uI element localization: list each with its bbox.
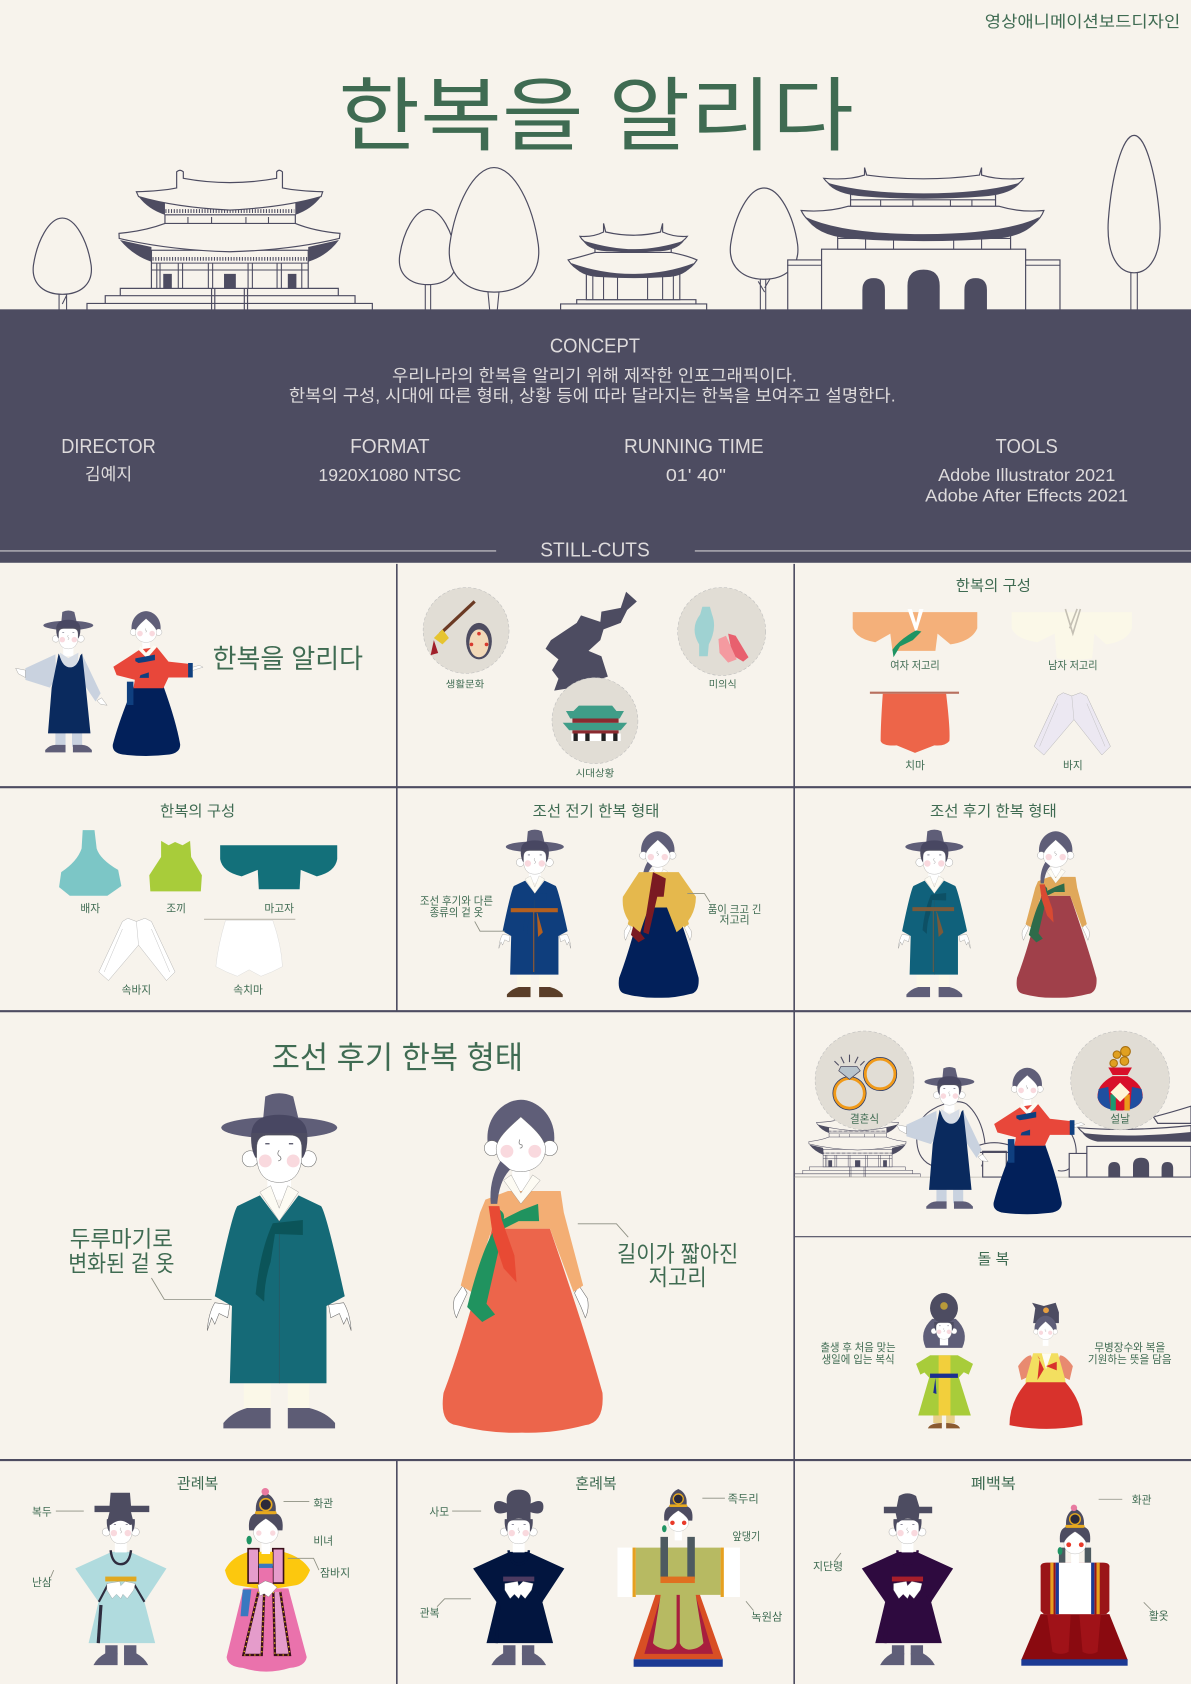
figure: woman in red jeogori <box>994 1068 1085 1214</box>
figure: late Joseon woman <box>1017 831 1097 998</box>
label: 남자 저고리 <box>1048 660 1098 672</box>
garment: magoja <box>220 845 337 889</box>
label: outer garment: 조선 후기와 다른 <box>420 895 493 907</box>
labels: wedding: 사모 <box>429 1506 449 1518</box>
heading: still-cuts: STILL-CUTS <box>540 539 650 561</box>
panel: wedding <box>420 1476 783 1667</box>
panel: late Joseon small <box>898 803 1097 998</box>
labels: wedding: 녹원삼 <box>751 1612 783 1624</box>
heading: 조선 후기 한복 형태 <box>272 1041 523 1076</box>
panel: pyebaek <box>813 1476 1169 1666</box>
label: era: 시대상황 <box>576 768 614 779</box>
icon: era circle <box>552 678 638 764</box>
text: boy caption <box>820 1342 896 1366</box>
panel: hanbok parts 1 <box>853 578 1132 772</box>
heading: 조선 후기 한복 형태 <box>930 803 1057 820</box>
label: wedding: 결혼식 <box>850 1112 879 1125</box>
labels: pyebaek: 화관 <box>1132 1495 1152 1507</box>
info: running time: RUNNING TIME <box>624 436 764 458</box>
label: 치마 <box>905 760 925 772</box>
heading: 조선 전기 한복 형태 <box>533 803 659 820</box>
figure: late Joseon man <box>898 830 970 997</box>
title: 한복을 알리다 <box>338 72 854 162</box>
icon: pavilion centre <box>561 223 707 310</box>
panel: culture cut <box>423 587 766 779</box>
garment: vest <box>149 841 202 891</box>
figure: early Joseon man <box>499 830 571 997</box>
panel: first birthday <box>820 1251 1172 1429</box>
label: 배자 <box>80 903 100 915</box>
labels: pyebaek <box>813 1495 1169 1623</box>
label: outer garment: 종류의 겉 옷 <box>430 907 483 919</box>
icon: tree <box>33 218 91 310</box>
panel: coming of age <box>32 1476 350 1672</box>
panel: occasions <box>795 1031 1191 1214</box>
label: 바지 <box>1063 760 1083 772</box>
panel: late Joseon large <box>68 1041 738 1433</box>
figure: man in purple robe <box>862 1493 953 1665</box>
figure: woman in red jeogori <box>113 611 203 756</box>
label: 여자 저고리 <box>890 659 940 672</box>
figure: birthday boy <box>916 1293 973 1428</box>
labels: wedding: 족두리 <box>728 1493 759 1505</box>
labels: coming of age: 화관 <box>313 1498 333 1510</box>
label: new year: 설날 <box>1110 1113 1130 1125</box>
garment: under-trousers <box>99 918 175 981</box>
icon: tree right <box>1108 135 1160 310</box>
label: short jeogori: 길이가 짧아진 <box>617 1242 738 1267</box>
heading: 관례복 <box>177 1476 219 1493</box>
heading: 한복의 구성 <box>160 803 235 820</box>
label: short jeogori <box>578 1224 738 1291</box>
info: tools: TOOLS <box>996 436 1058 458</box>
label: aesthetics: 미의식 <box>709 679 737 690</box>
panel: early Joseon <box>420 803 761 998</box>
heading: 혼례복 <box>575 1476 617 1493</box>
text: girl caption: 기원하는 뜻을 담음 <box>1088 1353 1172 1366</box>
label: 조끼 <box>166 903 186 915</box>
labels: coming of age: 잠바지 <box>320 1568 350 1580</box>
label: durumagi <box>68 1227 212 1299</box>
heading: intro: 한복을 알리다 <box>213 644 363 674</box>
figure: woman in pink <box>225 1488 310 1672</box>
label: outer garment <box>420 895 505 931</box>
garment: under-skirt <box>204 919 295 976</box>
figure: man in light robe <box>75 1493 166 1665</box>
labels: pyebaek: 지단령 <box>813 1561 843 1573</box>
labels: coming of age: 난삼 <box>32 1577 52 1589</box>
garment: male jeogori <box>1012 609 1132 660</box>
label: short jeogori: 저고리 <box>649 1266 707 1291</box>
text: girl caption: 무병장수와 복을 <box>1094 1342 1165 1354</box>
icon: tree centre right <box>730 188 798 310</box>
icon: palaces backdrop <box>795 1102 1191 1177</box>
heading: concept: CONCEPT <box>550 335 640 357</box>
text: concept description <box>289 365 896 406</box>
figure: early Joseon woman <box>619 831 699 998</box>
icon: new year circle <box>1071 1031 1170 1130</box>
info: director <box>61 436 156 484</box>
labels: wedding <box>420 1493 783 1624</box>
figure: woman in red robe <box>1021 1505 1128 1666</box>
figure: man in vest <box>897 1067 988 1209</box>
icon: Korean peninsula map <box>546 592 637 691</box>
figure: woman in orange jeogori <box>443 1100 603 1433</box>
figure: bride <box>618 1489 740 1667</box>
info: tools <box>925 436 1128 506</box>
label: 속바지 <box>122 984 151 996</box>
label: 속치마 <box>233 984 263 996</box>
labels: coming of age: 비녀 <box>313 1535 333 1547</box>
icon: trees centre left <box>399 168 539 310</box>
heading: 폐백복 <box>971 1476 1016 1493</box>
info: tools: Adobe After Effects 2021 <box>925 486 1128 506</box>
label: durumagi: 두루마기로 <box>70 1227 173 1252</box>
label: long jeogori: 저고리 <box>720 915 750 927</box>
label: 마고자 <box>264 903 294 915</box>
text: boy caption: 출생 후 처음 맞는 <box>820 1342 896 1354</box>
heading: 돌 복 <box>977 1251 1009 1268</box>
heading: 한복의 구성 <box>956 578 1031 595</box>
labels: pyebaek: 활옷 <box>1149 1610 1169 1623</box>
panel: hanbok parts 2 <box>59 803 337 996</box>
info: running time <box>624 436 764 485</box>
info: director: 김예지 <box>85 464 132 484</box>
garment: skirt <box>870 692 959 753</box>
icon: gate right <box>787 168 1060 310</box>
garment: female jeogori <box>853 609 977 657</box>
garment: baeja <box>59 830 121 896</box>
label: long jeogori: 품이 크고 긴 <box>708 904 761 916</box>
info: running time: 01' 40" <box>666 465 726 485</box>
labels: wedding: 관복 <box>420 1607 440 1619</box>
icon: living culture circle <box>423 587 509 673</box>
text: concept description: 우리나라의 한복을 알리기 위해 제작한 인포그래픽이다. <box>392 365 797 385</box>
garment: trousers <box>1034 693 1110 755</box>
icon: aesthetics circle <box>678 587 766 676</box>
text: concept description: 한복의 구성, 시대에 따른 형태, 상황 등에 따라 달라지는 한복을 보여주고 설명한다. <box>289 386 896 406</box>
info: format: 1920X1080 NTSC <box>318 465 461 485</box>
panel: intro cut <box>16 611 363 756</box>
icon: palace left <box>87 170 372 310</box>
label: long jeogori <box>687 894 761 927</box>
figure: groom <box>473 1490 564 1665</box>
panel: project info band <box>0 309 1191 563</box>
label: durumagi: 변화된 겉 옷 <box>68 1252 175 1277</box>
skyline illustration <box>33 135 1160 310</box>
figure: man in durumagi <box>207 1093 351 1428</box>
labels: wedding: 앞댕기 <box>732 1531 760 1543</box>
info: format: FORMAT <box>350 436 430 458</box>
text: girl caption <box>1088 1342 1172 1366</box>
labels: coming of age <box>32 1498 350 1589</box>
text: boy caption: 생일에 입는 복식 <box>822 1353 895 1366</box>
label: living culture: 생활문화 <box>446 678 484 690</box>
icon: wedding circle <box>815 1031 914 1130</box>
header label: 영상애니메이션보드디자인 <box>985 13 1180 31</box>
figure: man in vest <box>16 611 107 752</box>
figure: birthday girl <box>1010 1303 1083 1429</box>
info: director: DIRECTOR <box>61 436 156 458</box>
labels: coming of age: 복두 <box>32 1506 52 1518</box>
info: format <box>318 436 461 485</box>
info: tools: Adobe Illustrator 2021 <box>938 465 1115 485</box>
